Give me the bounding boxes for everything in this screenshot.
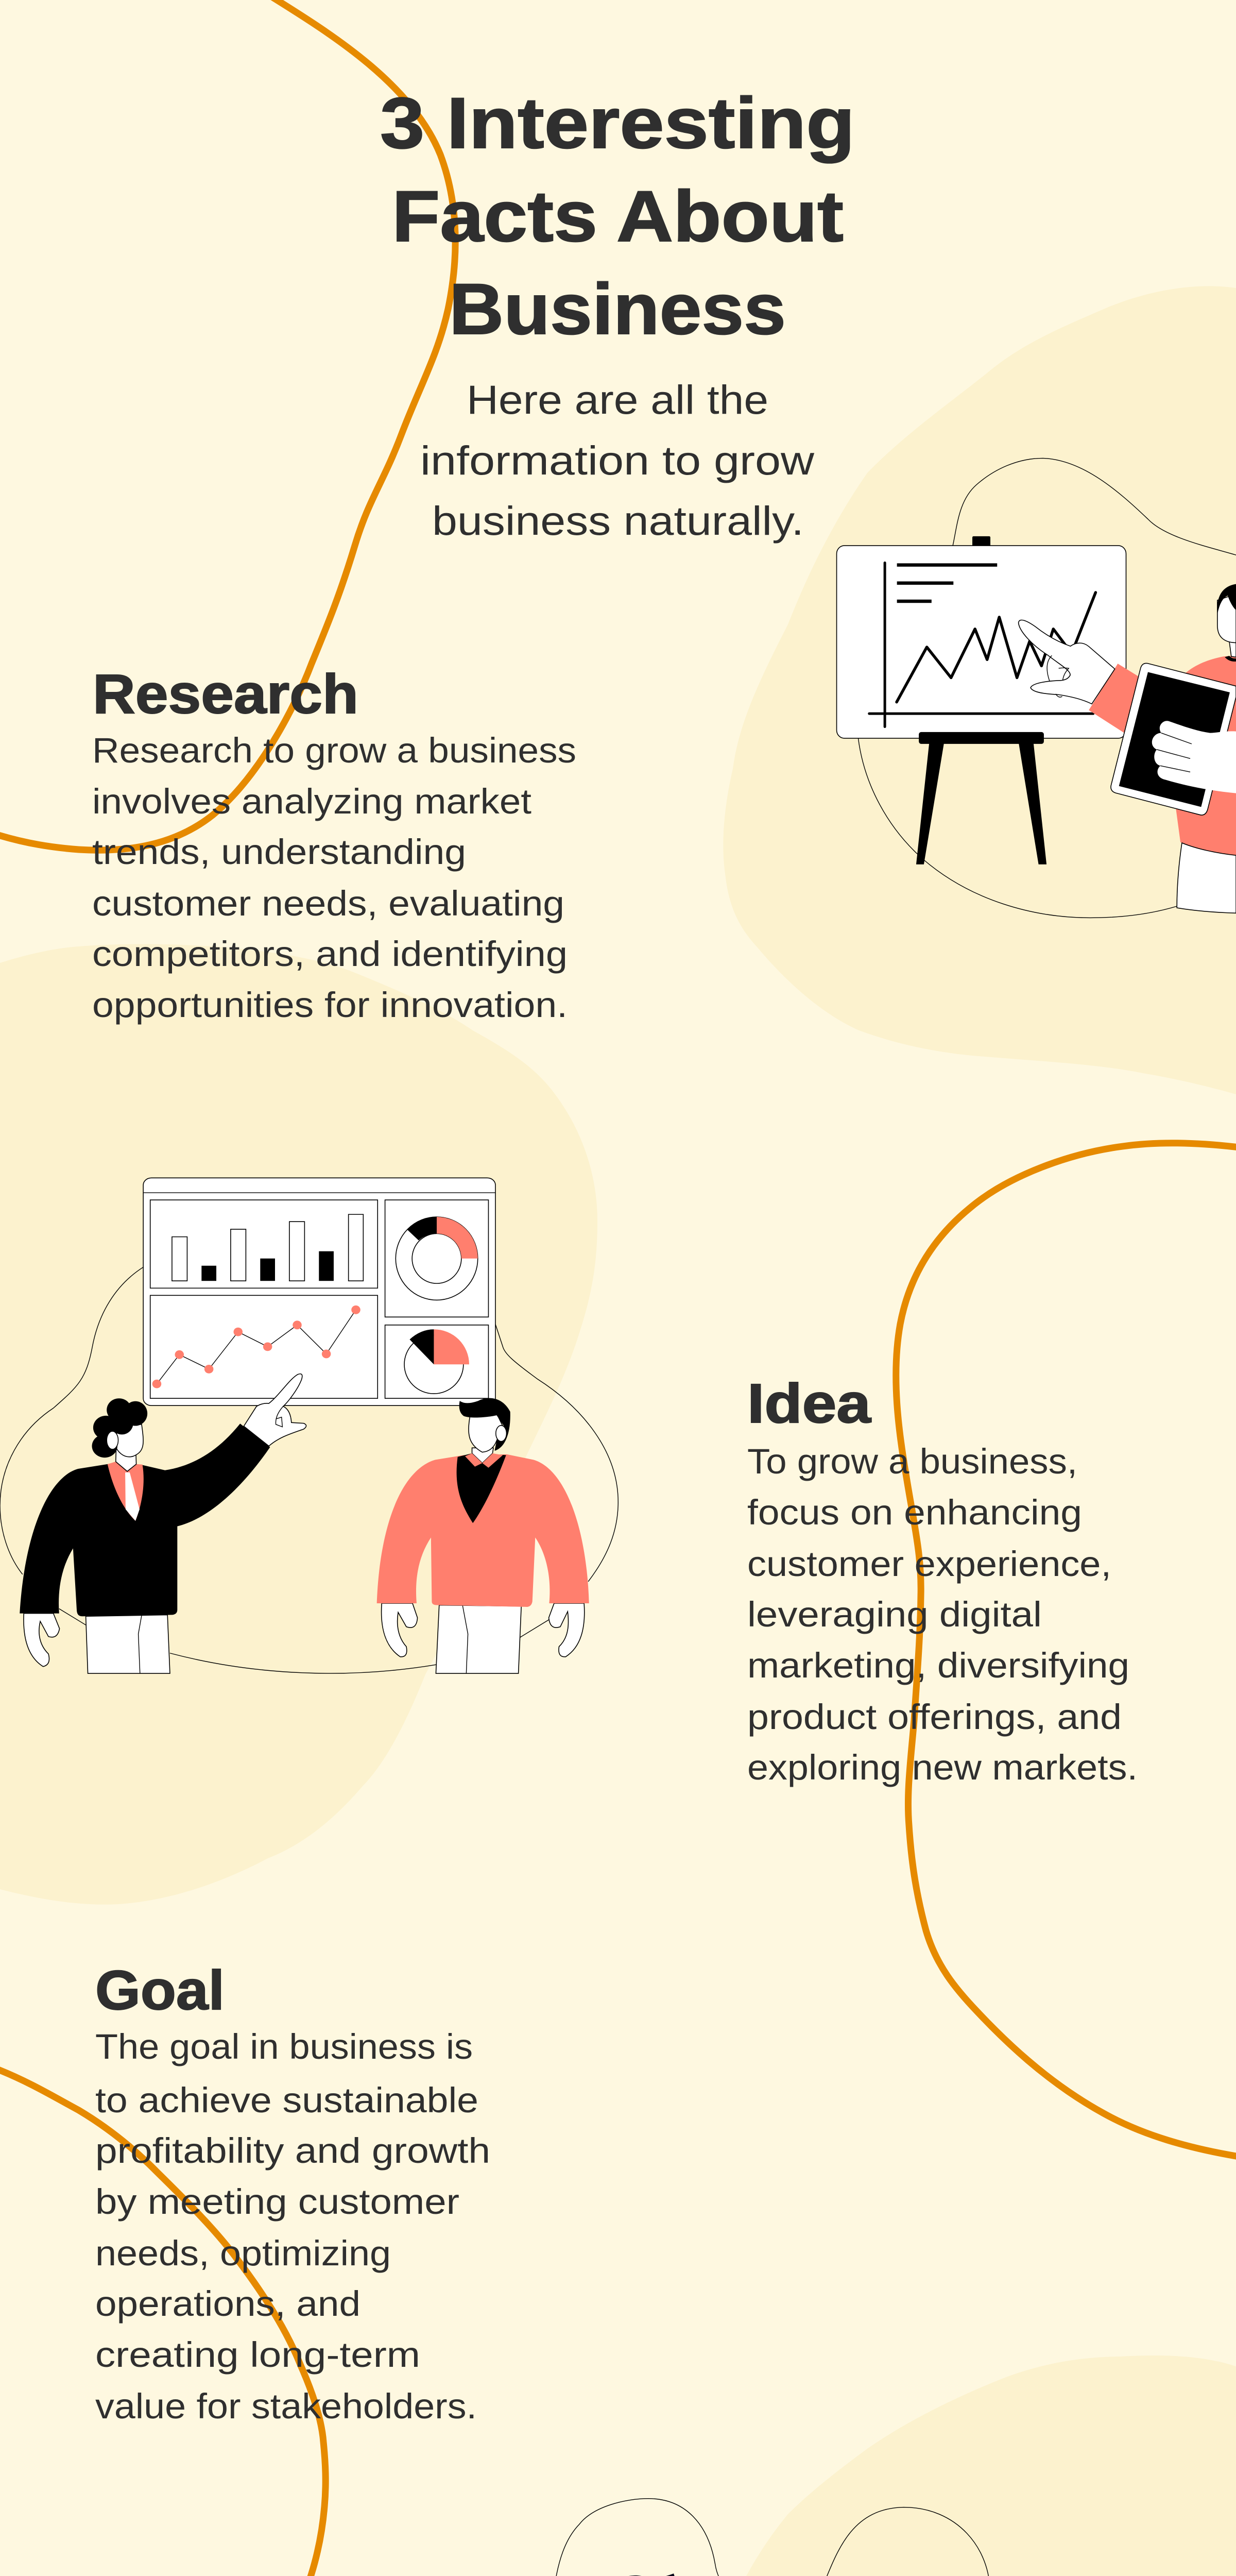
ear	[496, 1426, 506, 1442]
panel: bar chart	[150, 1200, 377, 1288]
hair	[1217, 584, 1236, 614]
title: 3 Interesting	[380, 82, 855, 163]
illustration: man with chart cards	[539, 2499, 1236, 2576]
sleeve	[1089, 664, 1139, 733]
text block: Research: customer needs, evaluating	[92, 884, 564, 923]
pants	[86, 1615, 170, 1673]
text block: Goal: needs, optimizing	[95, 2233, 391, 2273]
neck and collar	[1229, 641, 1236, 657]
panel: pie chart	[385, 1325, 488, 1398]
face and neck	[116, 1448, 136, 1471]
text block: Goal	[95, 2027, 490, 2426]
subtitle: business naturally.	[432, 498, 804, 544]
text block: Idea: exploring new markets.	[747, 1748, 1138, 1787]
heading: Research: Research	[93, 663, 358, 725]
presenter body	[1176, 655, 1236, 855]
neck	[472, 1448, 493, 1463]
dashboard window	[143, 1178, 495, 1405]
collar	[465, 1453, 503, 1468]
jacket	[20, 1423, 270, 1616]
subtitle: information to grow	[420, 437, 815, 483]
thin outline blob	[858, 458, 1236, 918]
text block: Goal: by meeting customer	[95, 2182, 459, 2222]
left hand	[24, 1614, 60, 1667]
easel	[916, 732, 1046, 865]
text block: Research: involves analyzing market	[92, 782, 531, 821]
text block: Goal: value for stakeholders.	[95, 2386, 477, 2426]
hands	[382, 1603, 585, 1657]
hair	[92, 1398, 147, 1458]
undershirt	[457, 1453, 506, 1523]
subtitle: Here are all the	[467, 377, 768, 422]
hair	[459, 1398, 510, 1451]
face	[1217, 594, 1236, 643]
illustration: two people at dashboard	[0, 1178, 618, 1673]
line chart	[897, 592, 1095, 702]
panel: donut chart	[385, 1200, 488, 1317]
text block: Idea: To grow a business,	[747, 1442, 1077, 1481]
finger detail	[1047, 655, 1069, 697]
text block: Goal: to achieve sustainable	[95, 2080, 478, 2120]
orange curve: bottom left	[0, 2069, 325, 2576]
board	[837, 546, 1126, 738]
panel: line chart	[150, 1295, 377, 1398]
pants	[1177, 843, 1236, 913]
person: coral sweater	[377, 1398, 589, 1673]
tablet screen	[1119, 672, 1230, 807]
pants	[436, 1605, 521, 1673]
orange curve: right	[896, 1143, 1236, 2157]
heading: Goal: Goal	[95, 1959, 225, 2021]
shirt	[108, 1462, 144, 1521]
text block: Goal: operations, and	[95, 2284, 360, 2324]
person: black jacket	[20, 1374, 306, 1673]
background blob: top right	[723, 286, 1236, 1094]
hand on tablet	[1152, 721, 1236, 793]
orange curve: top left	[0, 0, 455, 850]
chart axes and legend lines	[869, 563, 1093, 727]
board clip	[972, 536, 990, 546]
tie	[125, 1472, 140, 1521]
text block: Research	[92, 731, 576, 1025]
text block: Research: trends, understanding	[92, 832, 466, 872]
background blob: middle left	[0, 944, 597, 1905]
text block: Idea	[747, 1442, 1138, 1787]
title: Business	[449, 268, 786, 349]
pointing hand	[1019, 620, 1115, 704]
text block: Research: Research to grow a business	[92, 731, 576, 770]
text block: Idea: customer experience,	[747, 1544, 1111, 1584]
hair	[583, 2573, 677, 2576]
sweater	[377, 1454, 589, 1607]
text block: Idea: marketing, diversifying	[747, 1646, 1129, 1685]
thin outline blob	[0, 1267, 618, 1673]
subtitle	[420, 377, 815, 544]
text block: Goal: creating long-term	[95, 2335, 420, 2375]
pointing hand	[244, 1374, 306, 1446]
text block: Research: competitors, and identifying	[92, 934, 568, 974]
title: Facts About	[392, 176, 844, 257]
ear	[107, 1431, 118, 1449]
text block: Goal: The goal in business is	[95, 2027, 473, 2066]
illustration: presenter at chart board	[837, 458, 1236, 918]
text block: Idea: focus on enhancing	[747, 1493, 1082, 1532]
tablet	[1111, 663, 1236, 815]
background blob: bottom right	[612, 2355, 1236, 2576]
heading: Idea: Idea	[747, 1372, 871, 1434]
text block: Idea: product offerings, and	[747, 1697, 1122, 1737]
text block: Research: opportunities for innovation.	[92, 985, 568, 1025]
text block: Goal: profitability and growth	[95, 2131, 490, 2171]
title	[380, 82, 855, 349]
face	[469, 1414, 503, 1452]
text block: Idea: leveraging digital	[747, 1595, 1042, 1634]
thin outline blob	[539, 2499, 1236, 2576]
